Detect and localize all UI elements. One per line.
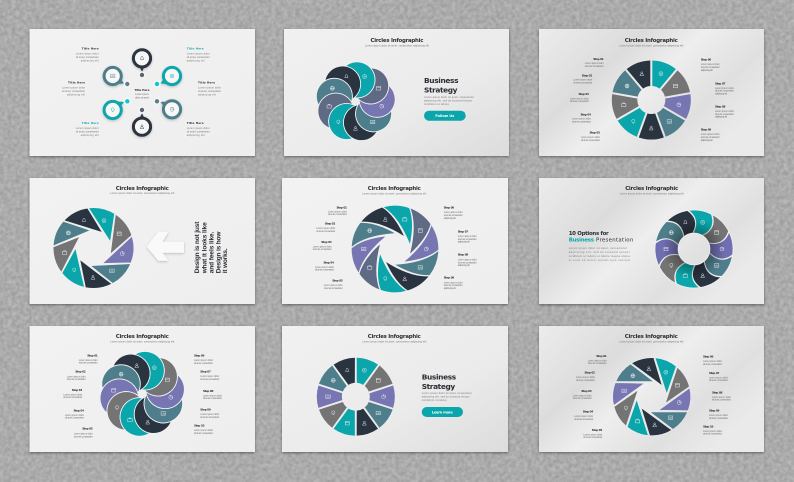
pin: upper right teal	[160, 67, 181, 85]
text: top left: sit amet, consectetur	[76, 55, 99, 59]
subtitle: Lorem ipsum dolor sit amet, consectetur adipiscing elit	[110, 340, 175, 344]
step labels	[573, 354, 731, 439]
step labels: sit amet, consectetur	[715, 112, 734, 116]
step labels: Lorem ipsum dolor	[703, 429, 722, 433]
donut chart	[312, 352, 400, 441]
card 8	[282, 326, 508, 452]
text: bottom left: Lorem ipsum dolor	[76, 126, 99, 130]
step labels: Lorem ipsum dolor	[316, 226, 335, 230]
panel: curved ring with text	[539, 178, 764, 304]
step labels: sit amet, consectetur	[194, 361, 213, 365]
step labels: sit amet, consectetur	[458, 260, 477, 264]
step labels: sit amet, consectetur	[315, 268, 334, 272]
text: middle left: sit amet, consectetur	[62, 89, 85, 93]
text: bottom left: adipiscing elit	[81, 133, 99, 137]
rotated quote: Design is how	[216, 231, 223, 273]
step labels: sit amet, consectetur	[203, 396, 222, 400]
step labels: Lorem ipsum dolor	[324, 283, 343, 287]
step labels: Step 08	[458, 253, 468, 257]
step labels: Step 03	[72, 388, 82, 392]
text: center: dolor sit amet	[135, 96, 149, 100]
text: middle right: Lorem ipsum dolor	[198, 86, 221, 90]
step labels: Step 03	[321, 240, 332, 244]
pin: lower left teal	[104, 101, 124, 119]
step labels: Step 01	[593, 57, 604, 61]
step labels: Step 08	[712, 390, 723, 394]
step labels: Lorem ipsum dolor	[588, 358, 607, 362]
aperture wheel	[607, 351, 696, 443]
step labels: adipiscing elit	[701, 68, 713, 72]
step labels: Step 05	[82, 427, 93, 431]
step labels: sit amet, consectetur	[570, 99, 589, 103]
step labels: sit amet, consectetur	[581, 138, 600, 142]
step labels: Lorem ipsum dolor	[444, 280, 463, 284]
step labels: Step 03	[581, 389, 592, 393]
step labels: Step 09	[709, 409, 720, 413]
text: bottom right: Title Here	[187, 121, 204, 125]
step labels: Lorem ipsum dolor	[712, 395, 731, 399]
step labels: Lorem ipsum dolor	[458, 234, 477, 238]
connector dots	[124, 71, 161, 114]
step labels: sit amet, consectetur	[573, 396, 592, 400]
step labels: Step 07	[715, 81, 726, 85]
card 9	[539, 326, 764, 452]
text: center	[134, 88, 150, 100]
body text: incididunt ut labore et dolore magna aliqua	[569, 254, 630, 258]
title: Circles Infographic	[625, 186, 678, 192]
body text: Lorem ipsum dolor sit amet, consectetur	[422, 391, 472, 395]
step labels: sit amet, consectetur	[200, 377, 219, 381]
panel: ten petals	[30, 326, 255, 452]
button: Learn more	[432, 410, 453, 414]
text: top right	[187, 46, 210, 62]
text: top right: sit amet, consectetur	[187, 55, 210, 59]
subtitle: Lorem ipsum dolor sit amet, consectetur adipiscing elit	[619, 43, 684, 47]
title: Circles Infographic	[625, 334, 678, 340]
subtitle: Lorem ipsum dolor sit amet, consectetur adipiscing elit	[620, 192, 684, 196]
step labels: Step 01	[596, 354, 607, 358]
text: top left: Title Here	[82, 46, 99, 50]
panel: spiral blades	[282, 178, 508, 304]
step labels: Step 07	[200, 370, 211, 374]
step labels: sit amet, consectetur	[576, 378, 595, 382]
step labels: Step 05	[332, 279, 343, 283]
text: middle right: Title Here	[198, 80, 215, 84]
text: middle left: Title Here	[68, 80, 85, 84]
step labels: sit amet, consectetur	[458, 237, 477, 241]
text: bottom left	[76, 121, 99, 137]
step labels: Lorem ipsum dolor	[703, 359, 722, 363]
step labels: Step 01	[336, 205, 347, 209]
step labels: Lorem ipsum dolor	[701, 62, 720, 66]
step labels: Lorem ipsum dolor	[585, 61, 604, 65]
step labels: adipiscing elit	[715, 92, 727, 96]
step labels: Lorem ipsum dolor	[715, 86, 734, 90]
step labels: Step 02	[584, 371, 595, 375]
step labels: Step 10	[194, 424, 205, 428]
pin: lower right steel	[160, 101, 181, 118]
step labels: Step 04	[324, 260, 334, 264]
step labels: Step 02	[75, 370, 86, 374]
step labels: Step 04	[583, 409, 593, 413]
step labels: sit amet, consectetur	[701, 65, 720, 69]
title: Circles Infographic	[370, 38, 424, 44]
title: Circles Infographic	[368, 334, 421, 340]
step labels: sit amet, consectetur	[194, 431, 213, 435]
step labels: Step 02	[325, 221, 335, 225]
text: middle right: adipiscing elit	[198, 92, 216, 96]
step labels: Lorem ipsum dolor	[200, 412, 219, 416]
body text: adipiscing elit, sed do eiusmod tempor	[422, 394, 470, 398]
petal wheel	[311, 59, 398, 146]
body text	[569, 246, 630, 262]
step labels: sit amet, consectetur	[573, 80, 592, 84]
step labels: adipiscing elit	[701, 138, 713, 142]
text: bottom right: adipiscing elit	[187, 133, 205, 137]
step labels: sit amet, consectetur	[328, 212, 347, 216]
step labels: Step 06	[703, 355, 714, 359]
text: center: Title Here	[134, 88, 150, 92]
card 7	[30, 326, 255, 452]
text: top left	[76, 46, 99, 62]
step labels: Lorem ipsum dolor	[200, 374, 219, 378]
step labels: Lorem ipsum dolor	[194, 428, 213, 432]
step labels: sit amet, consectetur	[444, 283, 463, 287]
text: middle left: adipiscing elit	[67, 92, 85, 96]
step labels: Lorem ipsum dolor	[313, 244, 332, 248]
step labels: sit amet, consectetur	[324, 286, 343, 290]
step labels: Lorem ipsum dolor	[709, 413, 728, 417]
step labels: Lorem ipsum dolor	[67, 374, 86, 378]
body text: Lorem ipsum dolor sit amet, consectetur	[569, 246, 627, 250]
step labels: Step 07	[709, 371, 720, 375]
panel: aperture with arrow	[30, 178, 255, 304]
text: bottom left: sit amet, consectetur	[76, 130, 99, 134]
heading	[424, 76, 459, 94]
step labels: Step 06	[444, 206, 454, 210]
text: bottom left: Title Here	[82, 121, 99, 125]
rotated quote: and feels like.	[209, 231, 216, 273]
step labels: Lorem ipsum dolor	[573, 394, 592, 398]
step labels: sit amet, consectetur	[588, 361, 607, 365]
title: Circles Infographic	[625, 38, 678, 44]
text: top left: Lorem ipsum dolor	[76, 52, 99, 56]
heading: Business	[569, 238, 594, 244]
panel: nine segment donut	[539, 29, 764, 156]
step labels: sit amet, consectetur	[583, 435, 602, 439]
step labels: sit amet, consectetur	[585, 64, 604, 68]
pin: top dark	[133, 50, 151, 72]
step labels: Lorem ipsum dolor	[576, 375, 595, 379]
step labels: Step 05	[590, 131, 600, 135]
spiral wheel	[348, 203, 442, 295]
text: middle right: sit amet, consectetur	[198, 89, 221, 93]
subtitle: Lorem ipsum dolor sit amet, consectetur adipiscing elit	[619, 340, 684, 344]
subtitle: Lorem ipsum dolor sit amet, consectetur adipiscing elit	[110, 191, 175, 195]
step labels: adipiscing elit	[444, 286, 456, 290]
step labels: Lorem ipsum dolor	[573, 78, 592, 82]
heading	[422, 372, 457, 391]
rotated quote: it works.	[222, 248, 229, 273]
step labels: sit amet, consectetur	[316, 229, 335, 233]
rotated quote: Design is not just	[194, 221, 201, 273]
title: Circles Infographic	[368, 186, 421, 192]
step labels: sit amet, consectetur	[65, 416, 84, 420]
button: Follow Us	[435, 114, 454, 118]
text: bottom right: sit amet, consectetur	[187, 130, 210, 134]
step labels: sit amet, consectetur	[63, 395, 82, 399]
text: top right: Title Here	[187, 46, 204, 50]
body text	[424, 95, 474, 106]
aperture wheel	[48, 204, 137, 293]
step labels: Step 08	[715, 105, 726, 109]
step labels: sit amet, consectetur	[701, 135, 720, 139]
card 6	[539, 178, 764, 304]
step labels	[570, 57, 734, 142]
step labels: Step 07	[458, 229, 468, 233]
step labels: sit amet, consectetur	[572, 120, 591, 124]
step labels: adipiscing elit	[458, 240, 470, 244]
card 2	[284, 29, 509, 156]
heading: Strategy	[422, 382, 455, 391]
step labels: Lorem ipsum dolor	[315, 265, 334, 269]
body text: incididunt ut labore	[422, 398, 447, 402]
step labels: sit amet, consectetur	[715, 88, 734, 92]
step labels: sit amet, consectetur	[313, 247, 332, 251]
text: middle left: Lorem ipsum dolor	[62, 86, 85, 90]
step labels: Step 03	[578, 92, 589, 96]
step labels: Lorem ipsum dolor	[194, 358, 213, 362]
body text: Lorem ipsum dolor sit amet, consectetur	[424, 95, 474, 99]
subtitle: Lorem ipsum dolor sit amet, consectetur adipiscing elit	[362, 192, 427, 196]
step labels: Lorem ipsum dolor	[570, 96, 589, 100]
text: bottom right	[187, 121, 210, 137]
step labels: sit amet, consectetur	[709, 378, 728, 382]
panel: ten blade aperture	[539, 326, 764, 452]
heading: Business	[424, 76, 459, 85]
step labels: Lorem ipsum dolor	[574, 414, 593, 418]
pin: upper left steel	[104, 67, 124, 85]
text: middle right	[198, 80, 221, 96]
step labels: sit amet, consectetur	[709, 416, 728, 420]
body text: incididunt ut labore	[424, 102, 450, 106]
card 5	[282, 178, 508, 304]
petal wheel	[93, 345, 191, 443]
title: Circles Infographic	[116, 186, 169, 192]
step labels: Lorem ipsum dolor	[572, 117, 591, 121]
step labels: Lorem ipsum dolor	[203, 394, 222, 398]
step labels: sit amet, consectetur	[703, 432, 722, 436]
heading	[569, 231, 633, 244]
card 1	[30, 29, 255, 156]
panel: ten segment donut with text	[282, 326, 508, 452]
step labels: Step 06	[194, 354, 205, 358]
step labels: Step 04	[74, 408, 84, 412]
button	[422, 407, 463, 417]
rotated quote: what it looks like	[201, 222, 208, 274]
step labels: adipiscing elit	[458, 263, 470, 267]
step labels: Lorem ipsum dolor	[458, 258, 477, 262]
step labels: sit amet, consectetur	[200, 415, 219, 419]
step labels: sit amet, consectetur	[444, 213, 463, 217]
step labels: Lorem ipsum dolor	[74, 432, 93, 436]
step labels: Step 08	[203, 389, 214, 393]
text: top right: adipiscing elit	[187, 58, 205, 62]
step labels: Step 10	[703, 424, 714, 428]
step labels: Lorem ipsum dolor	[709, 376, 728, 380]
text: bottom right: Lorem ipsum dolor	[187, 126, 210, 130]
body text: adipiscing elit, sed do eiusmod tempor	[569, 250, 630, 254]
step labels: Step 05	[592, 428, 602, 432]
rotated quote	[194, 221, 229, 274]
text: middle left	[62, 80, 85, 96]
step labels: Lorem ipsum dolor	[583, 432, 602, 436]
step labels: adipiscing elit	[715, 114, 727, 118]
step labels: adipiscing elit	[444, 216, 456, 220]
step labels: Lorem ipsum dolor	[444, 210, 463, 214]
step labels: Step 09	[701, 127, 711, 131]
step labels: Step 09	[200, 408, 211, 412]
step labels: sit amet, consectetur	[67, 377, 86, 381]
step labels: sit amet, consectetur	[703, 362, 722, 366]
step labels	[313, 205, 477, 290]
panel: business strategy petals	[284, 29, 509, 156]
step labels: Lorem ipsum dolor	[328, 210, 347, 214]
step labels: Lorem ipsum dolor	[581, 135, 600, 139]
heading: Presentation	[596, 238, 633, 244]
text: center: Lorem ipsum	[135, 92, 149, 96]
subtitle: Lorem ipsum dolor sit amet, consectetur adipiscing elit	[365, 43, 429, 47]
heading: Strategy	[424, 86, 458, 94]
body text: ut enim ad minim veniam quis nostrud	[569, 258, 630, 262]
step labels: Lorem ipsum dolor	[63, 392, 82, 396]
panel: six-step circles	[30, 29, 255, 156]
step labels: Step 06	[701, 57, 711, 61]
step labels: Lorem ipsum dolor	[701, 132, 720, 136]
step labels	[63, 353, 222, 438]
text: top right: Lorem ipsum dolor	[187, 52, 210, 56]
step labels: sit amet, consectetur	[574, 417, 593, 421]
step labels: Lorem ipsum dolor	[79, 358, 98, 362]
pin: bottom dark	[133, 113, 151, 135]
heading: Business	[422, 372, 457, 382]
step labels: Step 02	[582, 74, 592, 78]
body text: adipiscing elit, sed do eiusmod tempor	[424, 98, 472, 102]
text: top left: adipiscing elit	[81, 58, 99, 62]
step labels: sit amet, consectetur	[79, 360, 98, 364]
step labels: sit amet, consectetur	[74, 434, 93, 438]
heading: 10 Options for	[569, 231, 609, 237]
subtitle: Lorem ipsum dolor sit amet, consectetur adipiscing elit	[362, 340, 427, 344]
donut chart	[605, 54, 696, 146]
button	[424, 111, 466, 121]
step labels: Step 01	[87, 353, 98, 357]
step labels: Step 09	[444, 276, 454, 280]
body text	[422, 391, 472, 402]
arrow pointing left	[147, 232, 184, 261]
step labels: sit amet, consectetur	[712, 398, 731, 402]
title: Circles Infographic	[116, 334, 169, 340]
step labels: Lorem ipsum dolor	[65, 413, 84, 417]
card 3	[539, 29, 764, 156]
step labels: Lorem ipsum dolor	[715, 109, 734, 113]
curved ring	[651, 206, 737, 292]
step labels: Step 04	[580, 112, 591, 116]
card 4	[30, 178, 255, 304]
